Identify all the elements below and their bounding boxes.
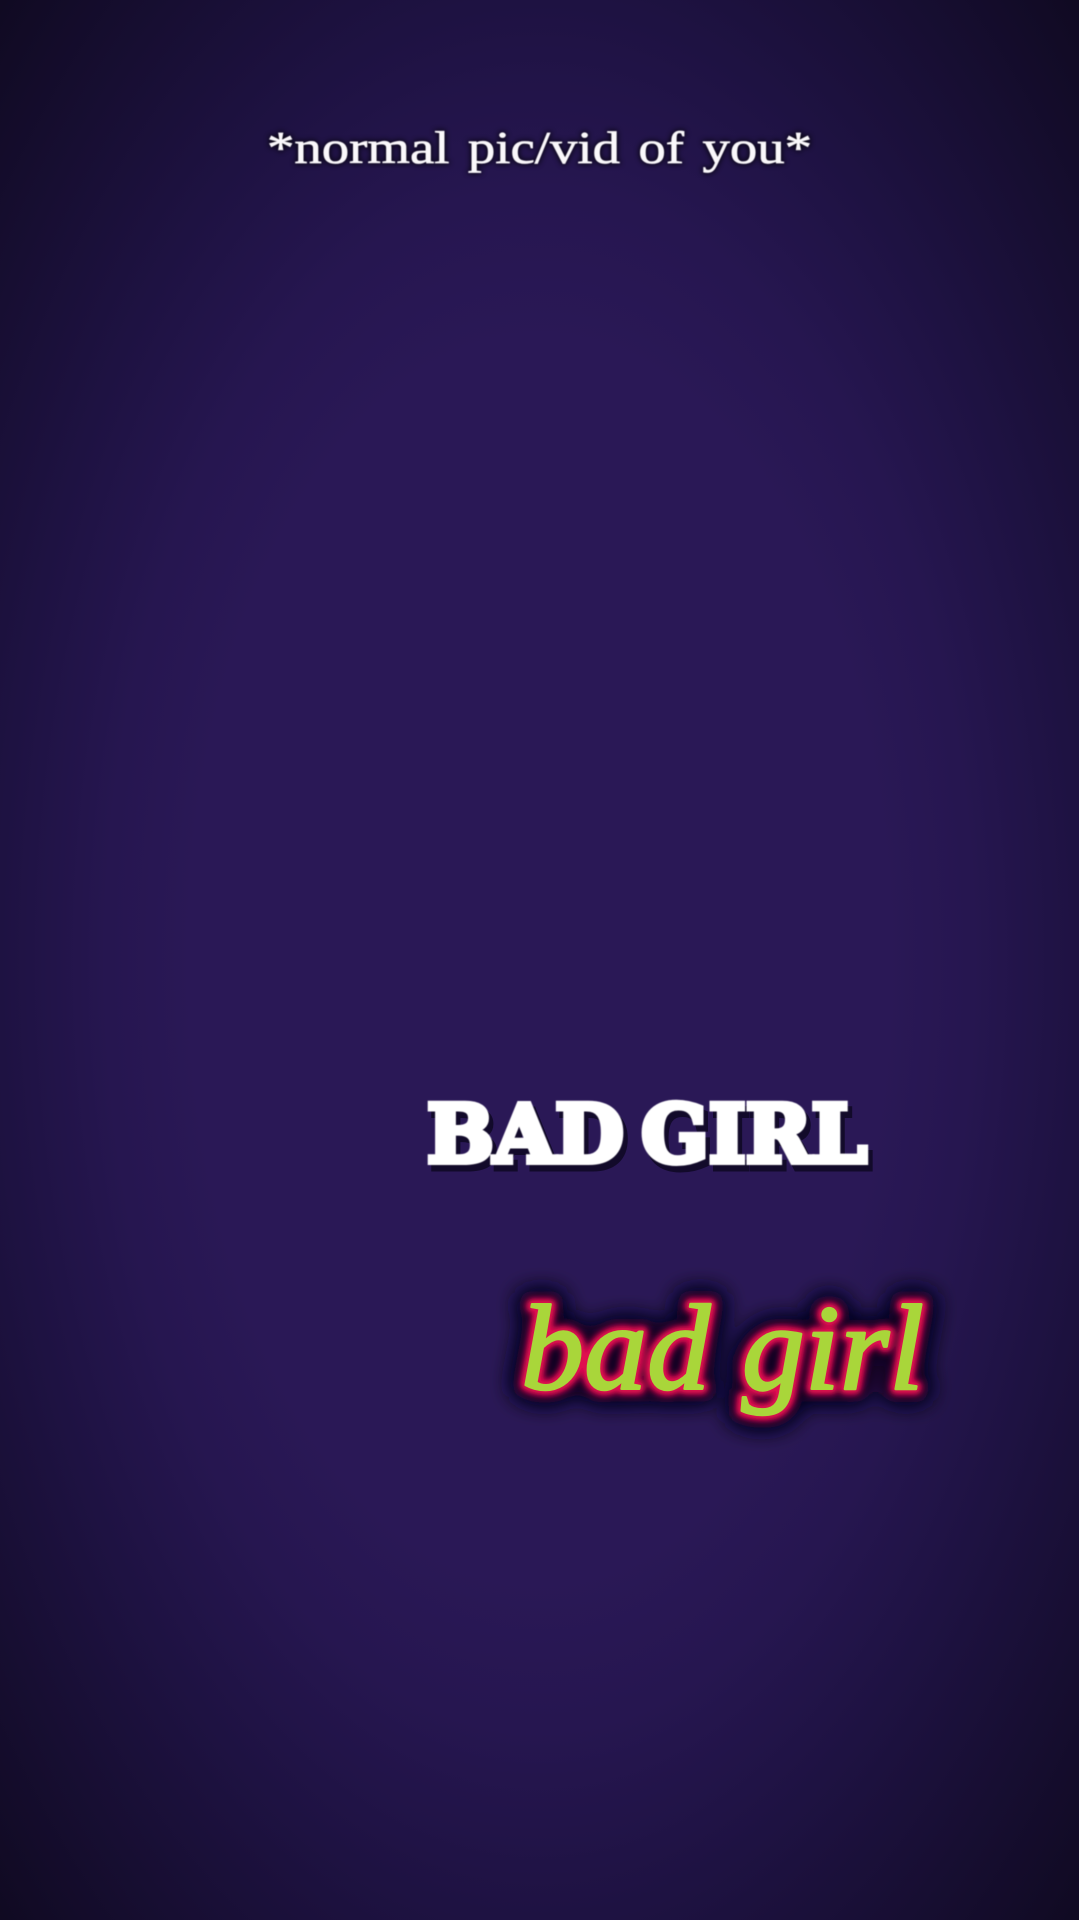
neon text: bad girl: bad girl [521, 1281, 924, 1416]
heading: BAD GIRL: BAD GIRL [431, 1093, 871, 1187]
heading: BAD GIRL: BAD GIRL [427, 1087, 867, 1181]
neon text: bad girl: bad girl [521, 1281, 924, 1416]
neon text: bad girl: bad girl [521, 1281, 924, 1416]
neon text: bad girl: bad girl [521, 1281, 924, 1416]
neon text: bad girl: bad girl [521, 1281, 924, 1416]
caption: normal pic/vid of you: *normal pic/vid of you* [267, 122, 812, 173]
caption: normal pic/vid of you: *normal pic/vid of you* [267, 122, 812, 173]
